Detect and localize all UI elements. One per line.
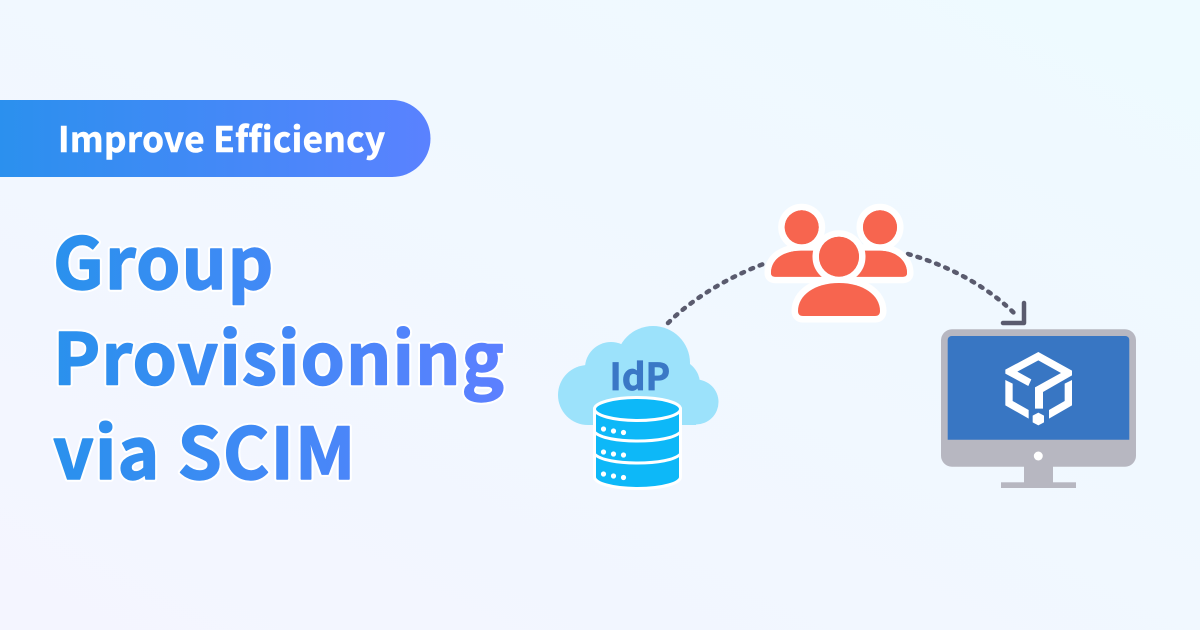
title: via SCIM <box>53 398 356 500</box>
icon: IdP cloud <box>558 326 718 425</box>
badge: Improve Efficiency <box>0 100 430 177</box>
icon: cube logo <box>1005 352 1072 425</box>
title: Provisioning <box>53 304 505 406</box>
title: Provisioning <box>53 304 505 406</box>
title: Group <box>53 208 274 310</box>
dotted arrow: IdP to group to app <box>668 254 1024 323</box>
title: Group <box>53 208 274 310</box>
icon: database <box>594 398 680 488</box>
badge: Improve Efficiency: Improve Efficiency <box>58 112 385 163</box>
title: via SCIM <box>53 398 356 500</box>
icon: group of people <box>771 210 907 316</box>
icon: monitor <box>941 329 1136 488</box>
title <box>53 208 505 500</box>
cloud label: IdP: IdP <box>610 347 670 401</box>
